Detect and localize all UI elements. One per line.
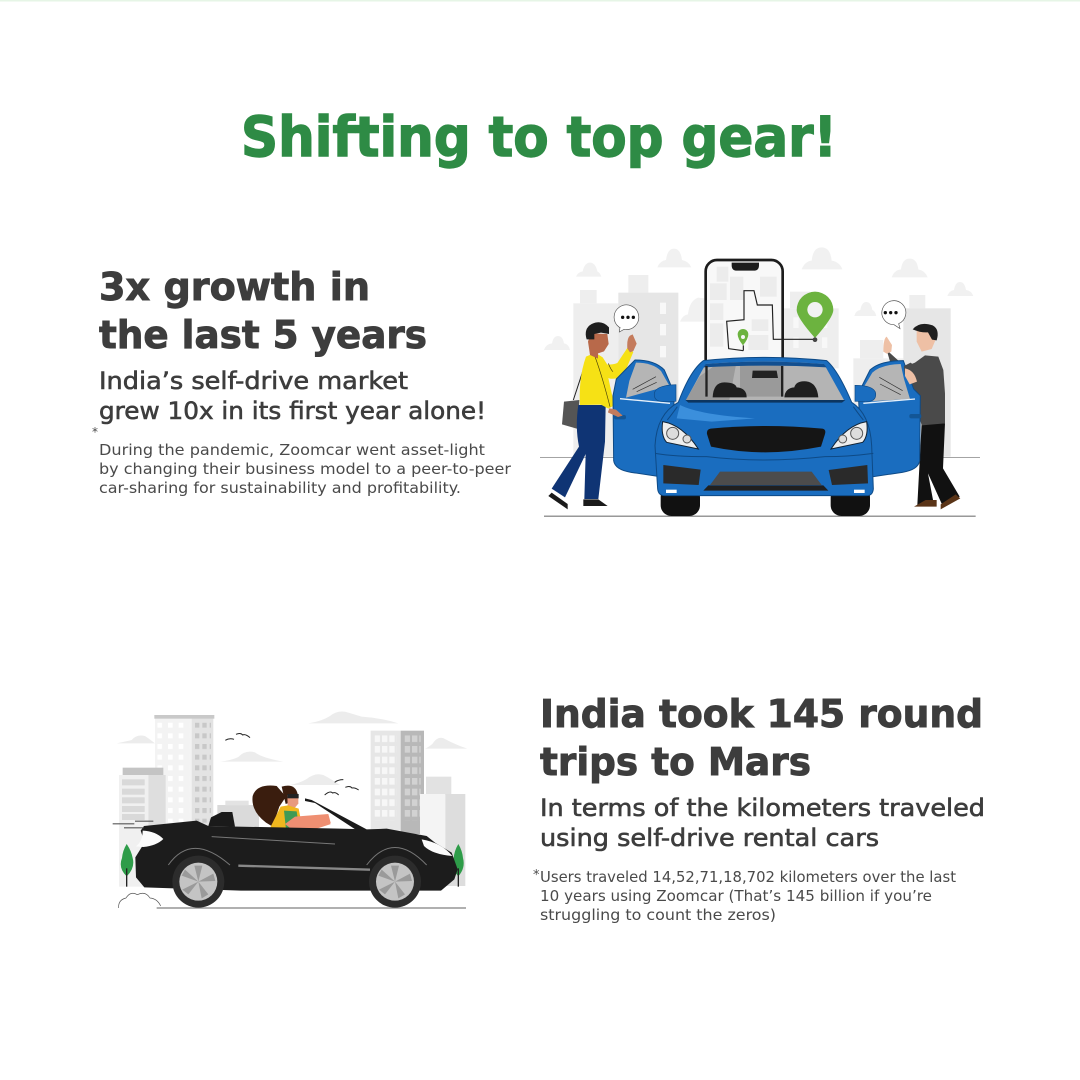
title: Shifting to top gear! [241,105,837,169]
heading: 3x growth [99,265,427,357]
subheading: market growth: grew 10x in its first year alone! [99,397,486,425]
blue car body [655,357,873,516]
icon: large map pin [797,292,833,342]
subheading: kilometers: In terms of the kilometers traveled [540,794,985,822]
heading: round trips: trips to Mars [540,740,811,784]
body text: pandemic note: * [92,425,98,439]
front wheel [369,856,421,908]
rear wheel [172,856,224,908]
body text: kilometers note: * [533,868,540,883]
city background [117,712,467,887]
subheading: kilometers [540,794,985,852]
heading: 3x growth: the last 5 years [99,313,427,357]
illustration: blue car with two people and phone map [540,247,980,517]
person: man in grey jacket [883,324,960,509]
city background [544,247,973,458]
icon: small map pin [738,329,748,345]
speech bubble: left [614,305,639,332]
text block: Mars trips [533,692,985,924]
body text: pandemic note: by changing their business model to a peer-to-peer [99,460,512,478]
speed lines [113,821,153,828]
ground lines [540,457,980,517]
black convertible body [135,798,458,891]
body text: kilometers note [533,868,956,924]
birds [225,733,359,795]
speech bubble: right [882,301,906,329]
body text: kilometers note: struggling to count the zeros) [540,906,776,924]
illustration: woman driving black convertible [113,712,467,909]
woman driver [252,786,331,830]
subheading: market growth: India’s self-drive market [99,367,408,395]
subheading: kilometers: using self-drive rental cars [540,824,879,852]
body text: kilometers note: Users traveled 14,52,71,18,702 kilometers over the last [540,868,956,886]
heading: round trips: India took 145 round [540,692,983,736]
road and dust cloud [119,893,466,909]
text block: market growth [92,265,512,497]
body text: kilometers note: 10 years using Zoomcar (That’s 145 billion if you’re [540,887,932,905]
heading: 3x growth: 3x growth in [99,265,370,309]
right open car door [858,361,921,478]
left open car door [608,360,674,478]
heading: round trips [540,692,983,784]
body text: pandemic note [92,425,512,497]
body text: pandemic note: During the pandemic, Zoomcar went asset-light [99,441,485,459]
icon: phone with map [706,260,815,380]
subheading: market growth [99,367,486,425]
person: man in yellow sweater [548,322,637,509]
body text: pandemic note: car-sharing for sustainability and profitability. [99,479,461,497]
car side mirrors [654,385,876,401]
trees [121,844,464,887]
